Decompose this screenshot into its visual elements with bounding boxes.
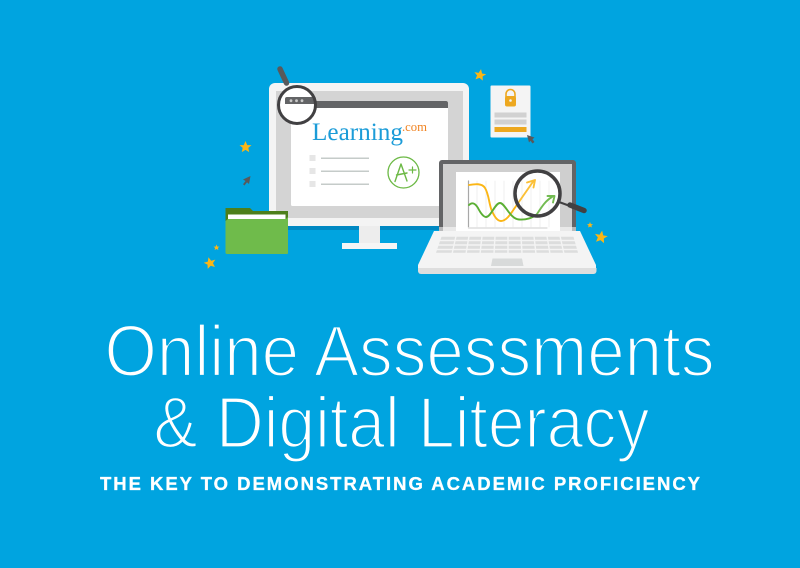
window title bar: [291, 101, 448, 108]
monitor body: [269, 83, 469, 226]
chart axes: [468, 181, 547, 228]
star: [214, 244, 220, 250]
laptop base edge: [418, 268, 596, 274]
stars: [203, 68, 609, 269]
monitor shadow: [269, 225, 469, 230]
yellow trend line: [469, 181, 534, 221]
icon: padlock: [505, 90, 516, 106]
line chart: [468, 180, 554, 228]
trackpad: [491, 258, 524, 266]
star: [594, 229, 609, 244]
screen window: [291, 101, 448, 206]
icon: magnifier over monitor: [278, 69, 316, 124]
checklist: [310, 155, 369, 187]
star: [240, 141, 252, 152]
login fields: [494, 112, 526, 118]
illustration: desktop monitor: [269, 83, 469, 249]
laptop screen: [456, 172, 560, 232]
illustration: login card: [490, 86, 530, 138]
laptop inner bezel: [443, 164, 572, 232]
title: [104, 311, 714, 464]
star: [587, 222, 593, 228]
laptop keyboard base: [418, 231, 596, 268]
Learning.com logo: Learning: [312, 119, 404, 146]
lid hinge highlight: [439, 227, 576, 232]
title: Online Assessments: [104, 311, 714, 392]
monitor bezel: [276, 91, 463, 218]
illustration: folder: [226, 208, 288, 254]
laptop lid: [439, 160, 576, 232]
chart grid: [477, 181, 549, 228]
star: [203, 256, 217, 269]
illustration: laptop: [418, 160, 596, 274]
star: [473, 68, 487, 81]
icon: magnifier over laptop: [515, 171, 584, 216]
green trend line: [469, 197, 552, 220]
A+ grade badge: [388, 157, 419, 188]
icon: cursor left: [243, 176, 250, 186]
keyboard keys: [435, 236, 579, 254]
icon: cursor near card: [527, 135, 534, 144]
Learning.com logo: .com: [402, 120, 427, 134]
monitor stand: [342, 226, 397, 249]
subtitle: THE KEY TO DEMONSTRATING ACADEMIC PROFICIENCY: [100, 473, 701, 494]
title: & Digital Literacy: [154, 382, 650, 464]
